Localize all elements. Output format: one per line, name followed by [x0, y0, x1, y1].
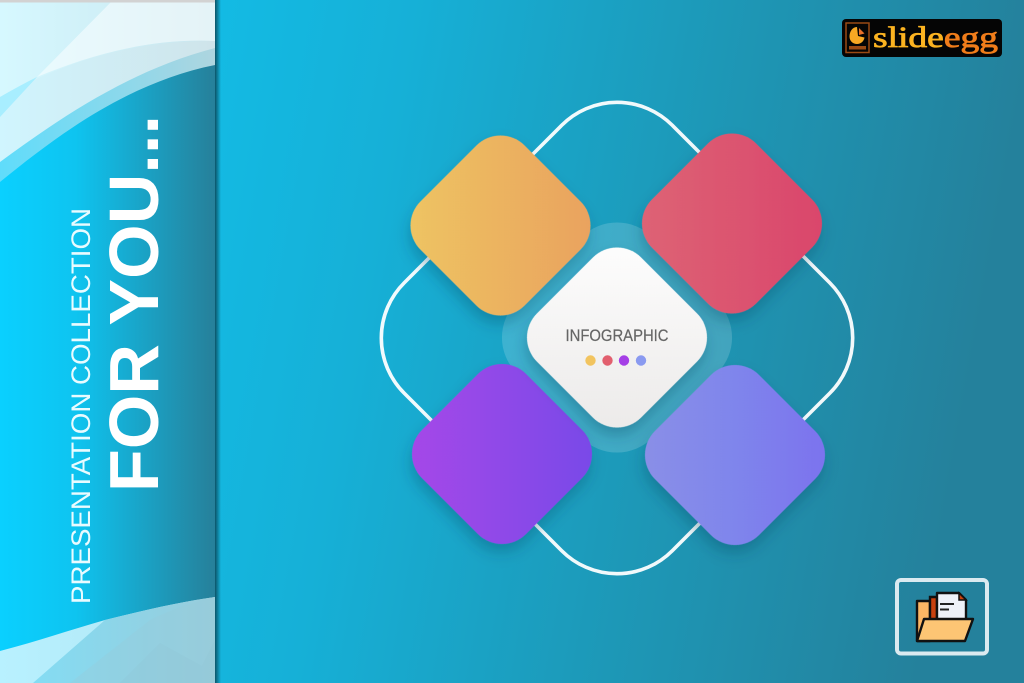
- diamond: red: [628, 119, 836, 328]
- diamond: purple: [398, 350, 606, 558]
- folder front: [917, 619, 973, 641]
- document: [937, 593, 966, 622]
- logo icon: [846, 23, 869, 52]
- sidebar top wave: [0, 0, 215, 182]
- sidebar edge shadow: [215, 0, 221, 683]
- diamond: periwinkle: [631, 351, 839, 559]
- sidebar heading: for you: FOR YOU...: [95, 115, 173, 492]
- center halo: [481, 202, 753, 473]
- logo: slideegg: [842, 19, 1002, 57]
- outer ring: [349, 70, 885, 606]
- folder back: [917, 601, 930, 641]
- sidebar bottom wave: [0, 597, 215, 683]
- sidebar heading: presentation collection: PRESENTATION COLLECTION: [66, 208, 96, 604]
- center dots: [585, 355, 646, 366]
- panel: left sidebar: [0, 0, 215, 683]
- icon: folder button: [897, 580, 987, 654]
- diamond: yellow: [396, 121, 605, 330]
- diamond: center white: [513, 233, 721, 442]
- folder tab red: [930, 597, 937, 620]
- center label: INFOGRAPHIC: [566, 327, 669, 345]
- logo wordmark: slide egg: [873, 21, 998, 54]
